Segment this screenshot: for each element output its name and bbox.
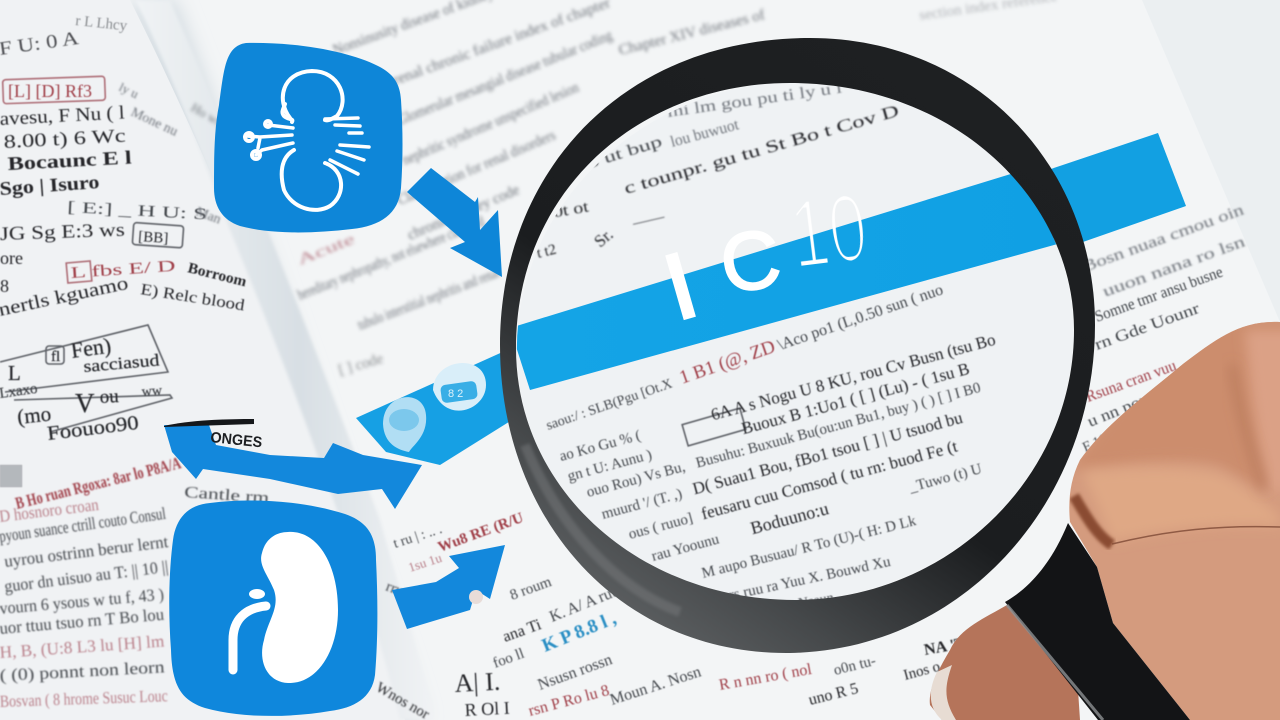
lens text: below band: ao Ko Gu % ( 6A A s Nogu U 8 KU, rou Cv Busn (tsu Bo (557, 330, 998, 465)
text block: right page lower text: u nn pout (1085, 388, 1157, 431)
hand holding the magnifier (930, 320, 1280, 720)
text block: left page upper text: Sgo | Isuro (0, 172, 100, 200)
text block: left page upper text (0, 13, 249, 321)
text block: left page lower text (0, 453, 432, 720)
text block: right page lower text: 1su 1u (406, 550, 444, 575)
text block: left page upper text: [L] [D] Rf3 (8, 81, 92, 101)
blue header band on the right page (1030, 133, 1186, 250)
lens text: above band: t t2 (535, 242, 558, 262)
text block: left page lower text: pyoun suance ctrill couto Consul (0, 504, 167, 546)
text block: left page lower text: rru rn (384, 579, 421, 605)
text block: right page lower text: R n nn ro ( nol (718, 661, 814, 694)
text block: blurred right page text: Chapter XIV diseases of (617, 7, 767, 59)
text block: right page lower text: Somne tmr ansu busne (1093, 264, 1225, 326)
magnifier handle (1005, 523, 1190, 720)
lens text: below band: M aupo Busuau/ R To (U)-( H: D Lk (700, 513, 918, 582)
text block: left page upper text: ly u (117, 79, 142, 102)
text block: left page upper text: Man (194, 205, 223, 228)
text block: right page lower text: K P 8.8 l , (539, 608, 620, 657)
lens text: below band: ouo Rou) Vs Bu, Busuhu: Buxuuk Bu(ou:un Bu1, buy ) ( ) [ ] I B0 (585, 380, 982, 501)
lens ICD code: handwritten title (666, 196, 864, 320)
text block: right page lower text: A| I. (454, 667, 501, 698)
text block: left page lower text: H, B, (U:8 L3 lu [H] lm (0, 632, 165, 662)
lens text: below band: rau Yoounu Boduuno:u _Tuwo (t) U (649, 457, 984, 565)
lens text: below band: muurd '/ (T. ,) D( Suau1 Bou, fBo1 tsou [ ] | U tsuod bu (599, 408, 965, 523)
text block: left page table box: V (75, 388, 95, 418)
text block: left page lower text: Bosvan ( 8 hrome Susuc Louc (0, 686, 168, 711)
callout icon: top kidney (214, 43, 402, 232)
upper finger shade (1070, 320, 1280, 490)
text block: right page lower text: F 11 (1081, 432, 1109, 456)
lens text: above band: —— (630, 208, 667, 232)
lens text: above band: 16 ut bup (573, 133, 664, 176)
text block: right page lower text: Bosn nuaa cmou oin (1081, 202, 1246, 276)
text block: right page lower text: rn Gde Uounr (1093, 300, 1203, 354)
arrow: middle blue arrow: ONGES (210, 429, 263, 451)
text block: left page lower text: Cantle rm (184, 484, 270, 507)
lens text: below band: saou:/ : SLB(Pgu [Ot.X 1 B1 (@, ZD \Aco po1 (L,0.50 sun ( nuo (543, 279, 946, 435)
lens ICD code: handwritten title: C (715, 212, 786, 311)
text block: left page lower text: D hosnoro croan (0, 495, 100, 526)
icon: right cup (433, 363, 486, 411)
lens rim (500, 38, 1095, 653)
text block: blurred right page text: renal chronic failure index of chapter (391, 0, 612, 89)
upper right knuckle (1245, 330, 1280, 490)
lens text: above band: mi lm gou pu ti ly u l (666, 80, 844, 121)
text block: blurred right page text: chronic kidney code (405, 182, 522, 244)
lens ICD code: handwritten title: I (654, 234, 707, 339)
arrow: top blue arrow (407, 168, 502, 277)
text block: left page table box: sacciasud (83, 350, 161, 376)
lens blue band (516, 174, 1056, 390)
text block: right page lower text: Nsusn rossn (536, 651, 614, 694)
text block: left page table box: Fen) (69, 333, 113, 363)
text block: blurred right page text: Acute (296, 231, 358, 269)
text block: left page upper text: JG Sg E:3 ws (0, 220, 125, 245)
gutter blue band with icons (356, 350, 512, 465)
magnifying glass (480, 38, 1100, 653)
text block: left page upper text: ore (0, 248, 23, 268)
icon: left cup (383, 397, 426, 452)
text block: blurred right page text: [ ] code (337, 351, 385, 379)
text block: right page lower text: Rsuna cran vuu (1084, 357, 1179, 406)
text block: left page upper text: 8.00 t) 6 Wc (3, 126, 126, 153)
text block: right page lower text: 8 roum (508, 574, 554, 604)
lower finger (930, 605, 1080, 720)
text block: right page lower text: NA 'T- (923, 634, 970, 659)
skin creases (1074, 365, 1280, 545)
text block: left page table box: L (8, 361, 21, 385)
text block: left page lower text: uyrou ostrinn berur lernt (3, 532, 170, 571)
text block: right page lower text: foo ll (491, 646, 527, 672)
text block: left page table box: fl (51, 349, 60, 365)
text block: blurred right page text: tubulo interstitial nephritis and renal (356, 265, 501, 334)
text block: left page upper text: r L Lhcy (75, 13, 128, 34)
lens text: above band: U0t ot (538, 198, 591, 224)
text block: left page upper text: 8 (0, 276, 9, 296)
icon: right cup: 8 2 (448, 388, 463, 400)
palm and thumb (1060, 320, 1280, 720)
text block: blurred right page text: nephritic syndrome unspecified lesion (400, 80, 582, 169)
lens contents (516, 86, 1056, 600)
lens text: below band: gn t U: Aunu ) Buoux B 1:Uo1 ( [ ] (Lu) - ( 1su B (565, 359, 971, 485)
text block: left page upper text: Borroom (186, 260, 249, 291)
text block: left page upper text: Mone nu (128, 105, 180, 140)
text block: left page table box: (mo (16, 402, 52, 429)
lens text: below band: ous ( ruuo] feusaru cuu Comsod ( tu rn: buod Fe (t (626, 436, 960, 543)
lens text: above band: lou buwuot (669, 116, 741, 151)
text block: right page lower text: R Ol I (464, 698, 510, 720)
text block: left page table box: Foouoo90 (46, 412, 140, 445)
lens text: below band: rs ruu ra Yuu X. Bouwd Xu (728, 554, 893, 604)
text block: right page lower text: K. A/ A ruu (547, 582, 622, 626)
text block: right page lower text (392, 202, 1247, 720)
arrow: lower blue arrow (392, 545, 505, 629)
lens text: below band (543, 279, 998, 616)
white kidney (261, 532, 338, 683)
text block: left page upper text: L fbs E/ D (70, 258, 176, 282)
text block: left page upper text: avesu, F Nu ( l (0, 102, 125, 130)
text block: left page table box (0, 325, 172, 487)
text block: left page lower text: ( (0) ponnt non leorn (0, 657, 166, 685)
callout icon: bottom kidney (169, 501, 377, 716)
text block: right page lower text: Moun A. Nosn (608, 663, 703, 709)
kidney outline with nerves (245, 71, 369, 210)
lens text: below band: uuu Nsaun (773, 591, 835, 616)
lens text: above band (535, 80, 901, 262)
text block: right page lower text: t ru | : .. . (392, 522, 444, 552)
text block: left page upper text: [BB] (138, 229, 169, 247)
text block: blurred right page text: hereditary nephropathy, not elsewhere classified (296, 214, 487, 304)
text block: left page lower text: vourn 6 ysous w tu f, 43 ) (0, 585, 165, 618)
text block: blurred right page text: Glomerular mesangial disease tubular coding (396, 28, 615, 129)
text block: blurred right page text (296, 0, 1059, 379)
text block: right page lower text: rsn P Ro lu 8 (527, 682, 611, 720)
crease highlight (1088, 468, 1275, 538)
rim highlight (525, 445, 680, 612)
text block: left page table box: ou (99, 386, 120, 408)
handle highlight (1007, 605, 1103, 720)
text block: left page lower text: guor dn uisuo au T: || 10 || (3, 557, 169, 596)
text block: right page lower text: uuon nana ro lsn (1101, 233, 1247, 301)
text block: right page lower text: Wu8 RE (R/U (436, 510, 526, 556)
text block: left page upper text: Bocaunc E l (7, 148, 132, 175)
renal pipe (233, 606, 266, 670)
lens text: above band: Sr. (590, 225, 617, 251)
text block: left page lower text: uor ttuu tsuo rn T Bo lou (0, 605, 165, 638)
text block: left page upper text: [ E:] _ H U: S (67, 199, 207, 223)
text block: right page lower text: ana Ti (501, 616, 544, 646)
text block: right page lower text: o0n tu- (832, 653, 878, 679)
text block: right page lower text: uno R 5 (807, 680, 860, 709)
text block: left page lower text: B Ho ruan Rgoxa: 8ar lo P8A/A (13, 453, 183, 513)
text block: right page lower text: Inos o (902, 659, 942, 684)
text block: blurred right page text: Classification for renal disorders (395, 127, 558, 209)
text block: left page upper text: Ho wn (188, 100, 227, 130)
lens text: above band: c tounpr. gu tu St Bo t Cov D (622, 101, 901, 198)
text block: left page table box: ww (141, 384, 163, 400)
lens ICD code: handwritten title: 10 (785, 173, 873, 289)
text block: left page upper text: E) Relc blood (139, 281, 246, 314)
arrow: middle blue arrow (164, 419, 422, 509)
